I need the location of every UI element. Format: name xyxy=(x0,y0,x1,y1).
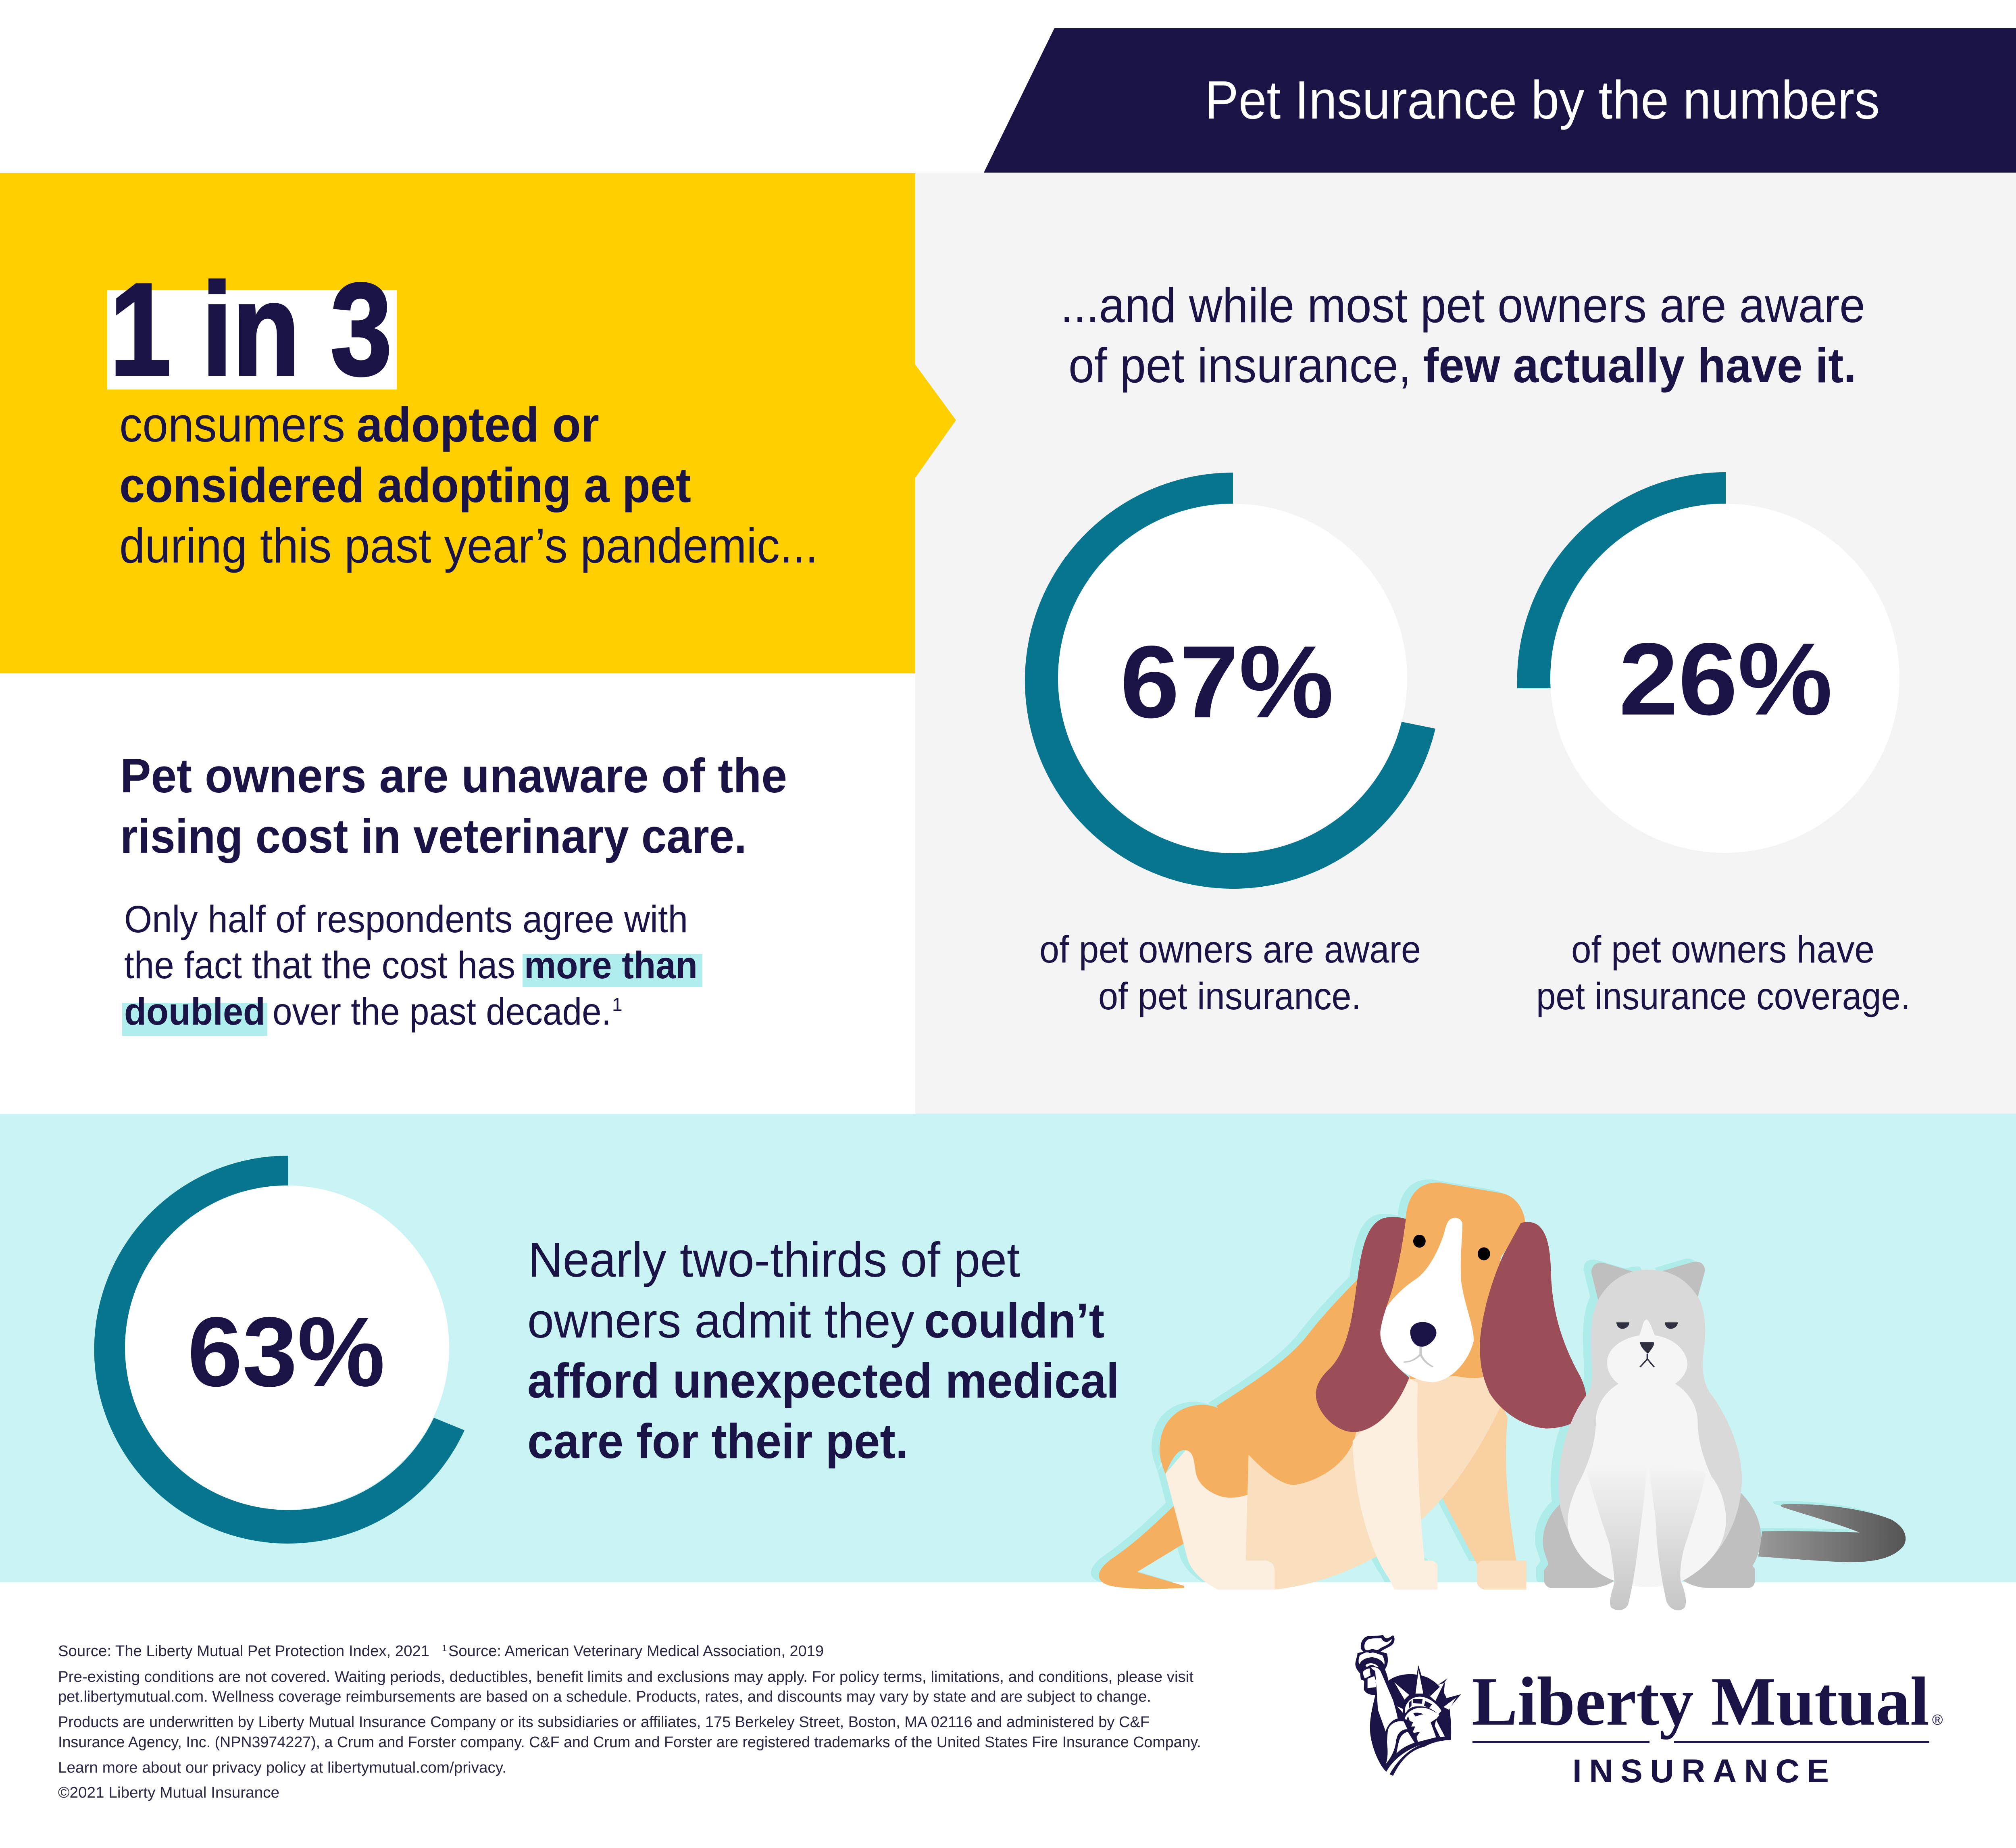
text block: cost doubled: doubled xyxy=(124,990,265,1033)
dog back xyxy=(1216,1280,1393,1485)
heading: veterinary cost: Pet owners are unaware of the xyxy=(120,749,787,803)
title: Pet Insurance by the numbers xyxy=(1205,70,1880,130)
footnotes: Products are underwritten by Liberty Mutual Insurance Company or its subsidiaries or affiliates, 175 Berkeley Street, Boston, MA 02116 and administered by C&F xyxy=(58,1714,1150,1731)
caption: 26%: of pet owners have xyxy=(1571,928,1874,971)
text block: awareness heading xyxy=(1060,278,1865,393)
caption: 26% xyxy=(1536,928,1910,1018)
logo: Liberty Mutual Insurance: INSURANCE xyxy=(1572,1753,1829,1790)
text block: adoption statement: consumers xyxy=(119,397,345,452)
dog haunch xyxy=(1160,1405,1249,1498)
big stat: 1 in 3: 1 in 3 xyxy=(110,256,392,402)
dog right ear xyxy=(1480,1222,1587,1429)
text block: unexpected medical care: owners admit they xyxy=(527,1293,914,1348)
cat front legs xyxy=(1586,1461,1706,1610)
dog mouth xyxy=(1404,1347,1433,1367)
cat nose xyxy=(1640,1342,1654,1354)
text block: cost doubled: 1 xyxy=(612,994,623,1015)
text block: unexpected medical care: afford unexpected medical xyxy=(527,1353,1119,1408)
caption: 26%: pet insurance coverage. xyxy=(1536,975,1910,1018)
heading: veterinary cost xyxy=(120,749,787,863)
text block: cost doubled: the fact that the cost has xyxy=(124,944,515,987)
footnotes: Insurance Agency, Inc. (NPN3974227), a Crum and Forster company. C&F and Crum and Forster are registered trademarks of the United States Fire Insurance Company. xyxy=(58,1734,1201,1751)
cat body xyxy=(1559,1269,1742,1581)
footnotes: Source: American Veterinary Medical Association, 2019 xyxy=(448,1643,824,1660)
cat haunches xyxy=(1543,1493,1761,1588)
dog front leg xyxy=(1353,1379,1437,1590)
cat ears xyxy=(1591,1262,1705,1304)
panel: title banner xyxy=(984,28,2016,173)
dog eyes xyxy=(1413,1235,1490,1260)
text block: adoption statement: during this past year’s pandemic... xyxy=(119,518,818,573)
chart: 67% donut xyxy=(1025,473,1435,889)
illustration: dog and cat xyxy=(1091,1179,1906,1610)
highlight box behind 1 in 3 xyxy=(107,290,397,390)
chart: 63% donut: 63% xyxy=(187,1296,385,1407)
text block: adoption statement: adopted or xyxy=(356,397,599,452)
text block: unexpected medical care: care for their pet. xyxy=(527,1414,908,1469)
chart: 63% donut xyxy=(94,1156,464,1544)
caption: 67%: of pet owners are aware xyxy=(1039,928,1421,971)
text block: adoption statement xyxy=(119,397,818,573)
footnotes: ©2021 Liberty Mutual Insurance xyxy=(58,1784,279,1801)
text block: awareness heading: ...and while most pet owners are aware xyxy=(1060,278,1865,333)
text block: awareness heading: few actually have it. xyxy=(1423,338,1856,393)
chart: 26% donut xyxy=(1517,472,1899,853)
caption: 67% xyxy=(1039,928,1421,1018)
text block: cost doubled: over the past decade. xyxy=(273,990,611,1033)
text block: cost doubled xyxy=(122,898,702,1036)
dog head xyxy=(1388,1183,1525,1379)
text block: unexpected medical care xyxy=(527,1232,1119,1469)
footnotes: Learn more about our privacy policy at libertymutual.com/privacy. xyxy=(58,1759,506,1776)
dog face blaze xyxy=(1380,1218,1474,1382)
footnotes: 1 xyxy=(442,1643,447,1653)
dog tail xyxy=(1099,1504,1187,1589)
cat mouth xyxy=(1640,1354,1654,1367)
chart: 67% donut: 67% xyxy=(1120,625,1334,740)
dog nose xyxy=(1410,1322,1436,1347)
text block: adoption statement: considered adopting a pet xyxy=(119,458,691,513)
panel: aqua medical care band xyxy=(0,1114,2016,1582)
panel: grey awareness background xyxy=(915,173,2016,1114)
dog back leg xyxy=(1441,1402,1517,1564)
text block: cost doubled: more than xyxy=(524,944,698,987)
footnotes: Source: The Liberty Mutual Pet Protection Index, 2021 xyxy=(58,1643,429,1660)
caption: 67%: of pet insurance. xyxy=(1098,975,1361,1018)
cat face and belly xyxy=(1568,1319,1726,1587)
wordmark: Liberty Mutual xyxy=(1472,1663,1929,1740)
dog left ear xyxy=(1316,1217,1409,1432)
logo: Liberty Mutual Insurance: ® xyxy=(1932,1711,1943,1728)
cat eyes xyxy=(1616,1322,1678,1329)
panel: yellow adoption stat xyxy=(0,173,956,673)
chart: 26% donut: 26% xyxy=(1619,622,1833,737)
text block: cost doubled: Only half of respondents agree with xyxy=(124,898,688,941)
dog chest and belly xyxy=(1241,1376,1501,1590)
footnotes xyxy=(58,1643,1201,1801)
footnotes: Pre-existing conditions are not covered. Waiting periods, deductibles, benefit limits and exclusions may apply. For policy terms, limitations, and conditions, please visit xyxy=(58,1669,1193,1685)
heading: veterinary cost: rising cost in veterinary care. xyxy=(120,809,747,863)
cat tail xyxy=(1758,1504,1906,1562)
text block: unexpected medical care: couldn’t xyxy=(924,1293,1104,1348)
logo: Liberty Mutual Insurance xyxy=(1355,1635,1943,1790)
footnotes: pet.libertymutual.com. Wellness coverage reimbursements are based on a schedule. Products, rates, and discounts may vary by state and are subject to change. xyxy=(58,1688,1151,1705)
icon: statue of liberty xyxy=(1355,1635,1461,1776)
dog paw xyxy=(1477,1560,1527,1590)
text block: unexpected medical care: Nearly two-thirds of pet xyxy=(528,1232,1020,1287)
text block: awareness heading: of pet insurance, xyxy=(1068,338,1411,393)
dog haunch lower xyxy=(1165,1446,1275,1590)
